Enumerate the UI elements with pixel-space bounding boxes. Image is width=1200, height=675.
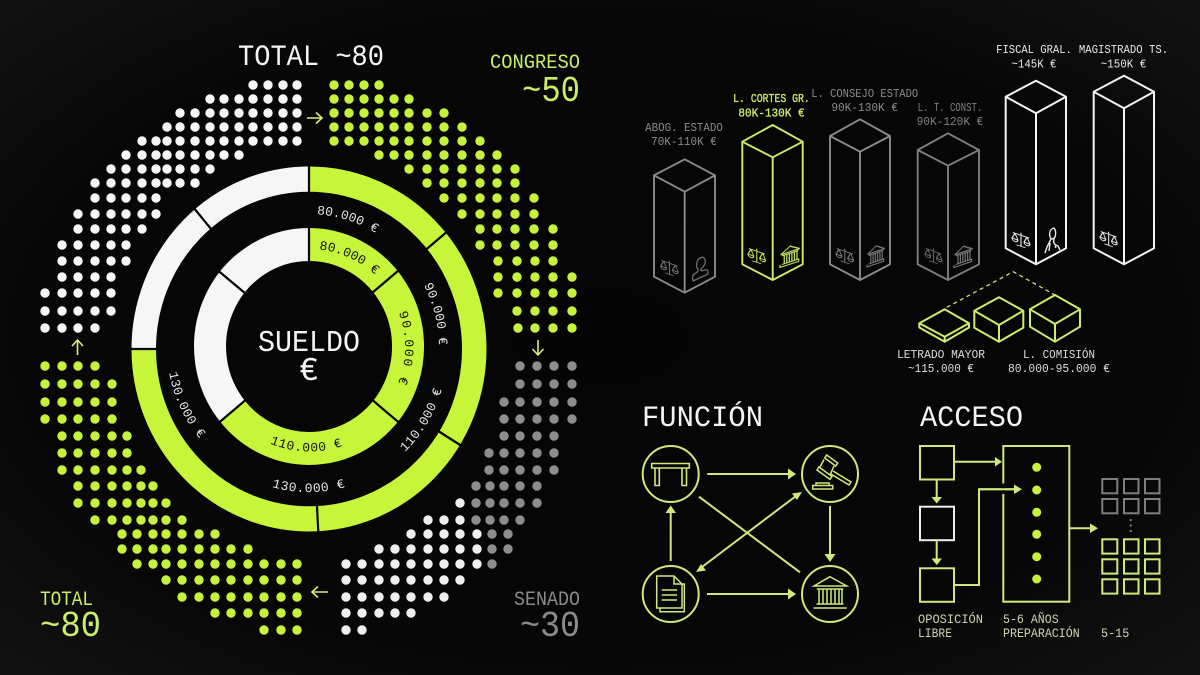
arrows: funcion links <box>666 468 836 600</box>
donut center label: SUELDO <box>258 326 360 361</box>
dots: preparation years <box>1032 463 1041 584</box>
label: abogado del estado: ABOG. ESTADO <box>645 121 723 135</box>
cube: letrado tribunal constitucional <box>918 133 979 280</box>
connector arrows <box>932 457 1098 585</box>
outer ring <box>129 164 474 534</box>
inner ring <box>210 227 408 448</box>
label: abogado del estado: 70K-110K € <box>651 135 717 149</box>
dots: white bottom block <box>346 503 477 630</box>
icon: building <box>780 243 800 267</box>
dots: lime top right block <box>334 85 572 328</box>
arrow: lime to white left <box>72 340 83 355</box>
label: abogado del estado <box>645 121 723 149</box>
label: magistrado tribunal supremo: ~150K € <box>1101 58 1146 72</box>
label: fiscal general: ~145K € <box>1012 58 1056 72</box>
label: fiscal general: FISCAL GRAL. <box>996 43 1072 57</box>
icon: scales <box>1012 230 1030 249</box>
label: letrado comision: 80.000-95.000 € <box>1008 362 1110 376</box>
icon: building <box>867 243 884 267</box>
label: letrado mayor <box>897 348 985 376</box>
label: preparacion <box>1003 612 1080 641</box>
icon: judge <box>1045 228 1060 253</box>
heading: funcion: FUNCIÓN <box>642 401 763 436</box>
label: preparacion: PREPARACIÓN <box>1003 626 1080 641</box>
icon: scales <box>836 246 854 265</box>
arrow: white to lime bottom <box>312 586 328 598</box>
label: congreso: CONGRESO <box>490 52 580 75</box>
label: total bottom left <box>40 589 101 647</box>
label: magistrado tribunal supremo: MAGISTRADO TS. <box>1079 43 1168 57</box>
ring value labels: 90.000 € <box>425 283 448 344</box>
diagram: acceso flow <box>920 446 1160 602</box>
cube: fiscal general <box>1006 81 1066 264</box>
arrow: white to lime <box>307 112 322 124</box>
ring value labels: 80.000 € <box>320 241 380 274</box>
label: letrado tribunal constitucional <box>917 101 983 129</box>
box: step 3 <box>920 568 954 602</box>
label: letrado tribunal constitucional: 90K-120K € <box>917 115 983 129</box>
ring value labels <box>169 206 448 492</box>
ring value labels: 110.000 € <box>270 436 342 452</box>
icon: person <box>693 257 708 281</box>
arrow: lime to grey <box>532 340 544 355</box>
ring value labels: 130.000 € <box>272 479 345 492</box>
ring value labels: 130.000 € <box>169 372 206 438</box>
label: total bottom left: ~80 <box>40 606 101 647</box>
small cube: letrado comision 2 <box>1030 295 1080 342</box>
cube: abogado del estado <box>654 159 715 293</box>
cube: letrado cortes generales <box>742 125 803 280</box>
label: congreso: ~50 <box>522 71 580 112</box>
icon: scales <box>1100 229 1117 248</box>
label: letrado cortes generales: L. CORTES GR. <box>733 92 810 106</box>
dashed connector <box>947 272 1055 307</box>
label: letrado mayor: LETRADO MAYOR <box>897 348 985 362</box>
label: oposicion libre: LIBRE <box>918 626 952 641</box>
label: congreso <box>490 52 580 112</box>
cube: letrado consejo estado <box>830 119 890 280</box>
ring value labels: 80.000 € <box>318 206 380 232</box>
label: senado: SENADO <box>514 589 580 612</box>
preparation block <box>1003 446 1069 602</box>
small cube: letrado mayor <box>919 309 969 342</box>
icon: scales <box>661 258 678 277</box>
node: table <box>643 446 699 502</box>
ring value labels: 90.000 € <box>398 311 414 386</box>
label: five to fifteen: 5-15 <box>1101 626 1129 641</box>
box: step 2 <box>920 507 954 540</box>
icon: scales <box>748 246 766 265</box>
label: letrado mayor: ~115.000 € <box>908 362 974 376</box>
box: step 1 <box>920 446 954 480</box>
label: letrado consejo estado: L. CONSEJO ESTADO <box>811 87 918 101</box>
node: document <box>643 566 699 622</box>
cube: magistrado tribunal supremo <box>1094 76 1154 264</box>
diagram: funcion <box>643 446 858 622</box>
label: fiscal general <box>996 43 1072 72</box>
label: preparacion: 5-6 AÑOS <box>1003 612 1059 627</box>
label: total bottom left: TOTAL <box>40 589 93 612</box>
label: letrado comision: L. COMISIÓN <box>1023 347 1095 362</box>
heading: acceso: ACCESO <box>920 402 1023 436</box>
label: letrado consejo estado: 90K-130K € <box>831 101 898 115</box>
node: gavel <box>802 446 858 502</box>
label: senado <box>514 589 580 647</box>
ring value labels: 110.000 € <box>400 388 442 452</box>
title: total: TOTAL ~80 <box>238 41 384 75</box>
label: letrado cortes generales: 80K-130K € <box>738 106 805 120</box>
label: magistrado tribunal supremo <box>1079 43 1168 72</box>
donut center label: € <box>299 353 319 390</box>
donut chart: salaries <box>132 166 486 532</box>
label: senado: ~30 <box>520 606 580 647</box>
label: letrado tribunal constitucional: L. T. CONST. <box>918 101 982 115</box>
dots: lime bottom left block <box>45 366 297 630</box>
node: building <box>802 566 858 622</box>
grid: lime squares <box>1102 539 1160 594</box>
donut center label <box>258 326 360 390</box>
grid: grey squares <box>1102 479 1160 533</box>
icon: building <box>954 243 972 267</box>
dots: white top left block <box>45 85 297 328</box>
label: letrado consejo estado <box>811 87 918 115</box>
dots: grey right block <box>476 366 572 564</box>
icon: scales <box>925 246 942 265</box>
label: oposicion libre: OPOSICIÓN <box>918 612 983 627</box>
label: oposicion libre <box>918 612 983 641</box>
small cube: letrado comision 1 <box>974 297 1023 342</box>
label: letrado cortes generales <box>733 92 810 120</box>
label: letrado comision <box>1008 347 1110 376</box>
